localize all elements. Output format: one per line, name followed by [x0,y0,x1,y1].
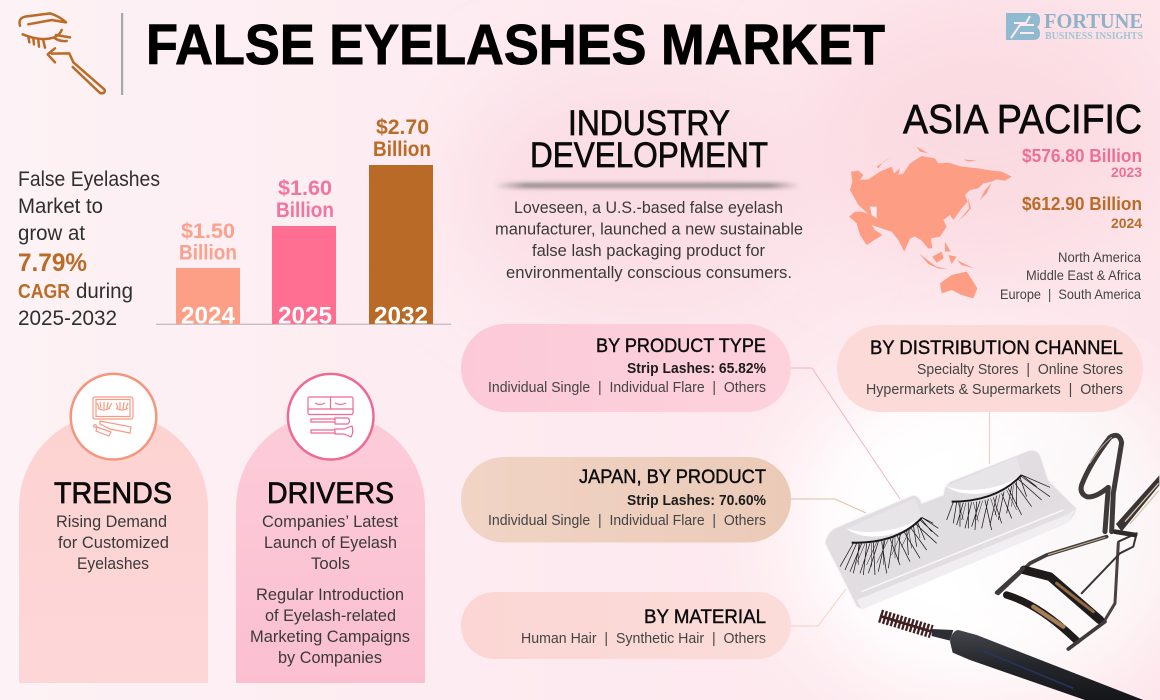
bar 2024 [176,220,240,330]
bar 2025: $1.60 [278,177,332,200]
values: Asia Pacific: $576.80 Billion [1022,146,1142,166]
text block: industry development: manufacturer, launched a new sustainable [495,220,803,238]
text block: industry development: false lash packaging product for [532,242,765,260]
false lash tray [825,450,1077,609]
CAGR text block: 7.79% [18,249,87,277]
heading: industry development: INDUSTRY [568,103,730,143]
icon: eye and lash applicator [20,13,105,93]
panel: drivers: Tools [311,555,350,573]
bar chart: market size [156,116,451,330]
eyelash curler [997,435,1159,649]
CAGR text block: during [76,280,133,303]
panel: by distribution channel: Specialty Stores | Online Stores [917,362,1123,378]
CAGR text block: grow at [18,222,85,245]
panel: drivers: DRIVERS [267,477,394,510]
panel: by product type: BY PRODUCT TYPE [596,335,766,357]
values: Asia Pacific [1022,146,1142,231]
panel: by product type: Individual Single | Individual Flare | Others [488,380,766,396]
photo: false lashes, curler and mascara [825,435,1159,700]
panel: drivers: of Eyelash-related [265,607,396,625]
panel: by distribution channel: Hypermarkets & Supermarkets | Others [866,382,1123,398]
CAGR text block: CAGR [18,281,70,303]
values: Asia Pacific: 2023 [1111,164,1142,180]
bar 2024: Billion [179,242,237,264]
panel: trends [19,374,208,683]
bar 2024: 2024 [181,302,236,330]
text block: other regions [1000,249,1141,302]
CAGR text block [18,168,160,330]
divider [121,13,123,95]
panel: by material [461,592,791,659]
heading: Asia Pacific: ASIA PACIFIC [903,96,1142,142]
heading underline shadow [495,183,800,188]
text block: other regions: Middle East & Africa [1026,267,1141,283]
text block: industry development: Loveseen, a U.S.-based false eyelash [514,199,783,217]
text block: industry development: environmentally conscious consumers. [506,264,792,282]
panel: drivers: Launch of Eyelash [264,534,397,552]
text block: other regions: Europe | South America [1000,286,1141,302]
panel: by product type: Strip Lashes: 65.82% [627,361,766,377]
panel: drivers: Companies’ Latest [262,513,398,531]
bar 2025: 2025 [278,302,332,330]
values: Asia Pacific: 2024 [1111,215,1142,231]
panel: Japan by product: Individual Single | Individual Flare | Others [488,513,766,529]
title: FALSE EYELASHES MARKET [146,13,885,77]
bar 2025: Billion [276,199,334,222]
panel: by material: Human Hair | Synthetic Hair | Others [521,631,766,647]
values: Asia Pacific: $612.90 Billion [1022,194,1142,214]
logo: Fortune Business Insights [1006,9,1143,42]
bar 2025 [272,177,336,330]
panel: by product type [461,324,791,412]
bar 2032: 2032 [374,302,428,330]
logo: Fortune Business Insights: FORTUNE [1044,9,1143,33]
panel: trends: for Customized [58,534,169,552]
connector lines [791,368,990,626]
text block: industry development [495,199,803,282]
icon: lash palette and tube [71,374,156,460]
CAGR text block: Market to [18,195,103,218]
bar 2024: $1.50 [181,220,235,243]
panel: trends: Eyelashes [77,555,149,573]
mascara wand and pen [880,616,1143,700]
panel: by distribution channel [837,325,1143,412]
panel: drivers: Regular Introduction [256,586,404,604]
panel: trends: Rising Demand [56,513,167,531]
panel: trends: TRENDS [54,477,172,510]
panel: drivers: Marketing Campaigns [250,628,410,646]
bar 2032 [369,116,433,330]
map: Asia Pacific [849,147,1012,298]
heading: industry development [530,103,768,175]
panel: drivers [236,374,425,683]
panel: Japan by product [461,457,791,542]
panel: Japan by product: JAPAN, BY PRODUCT [579,466,766,488]
panel: drivers: by Companies [278,649,382,667]
panel: Japan by product: Strip Lashes: 70.60% [627,493,766,509]
CAGR text block: False Eyelashes [18,168,160,191]
CAGR text block: 2025-2032 [18,307,117,330]
text block: other regions: North America [1058,249,1141,265]
panel: by material: BY MATERIAL [644,606,766,628]
logo: Fortune Business Insights: BUSINESS INSIGHTS [1045,31,1143,42]
panel: by distribution channel: BY DISTRIBUTION CHANNEL [870,337,1123,359]
bar 2032: $2.70 [376,116,429,139]
icon: lash palette and brushes [288,374,374,460]
bar 2032: Billion [373,138,431,161]
heading: industry development: DEVELOPMENT [530,135,768,175]
